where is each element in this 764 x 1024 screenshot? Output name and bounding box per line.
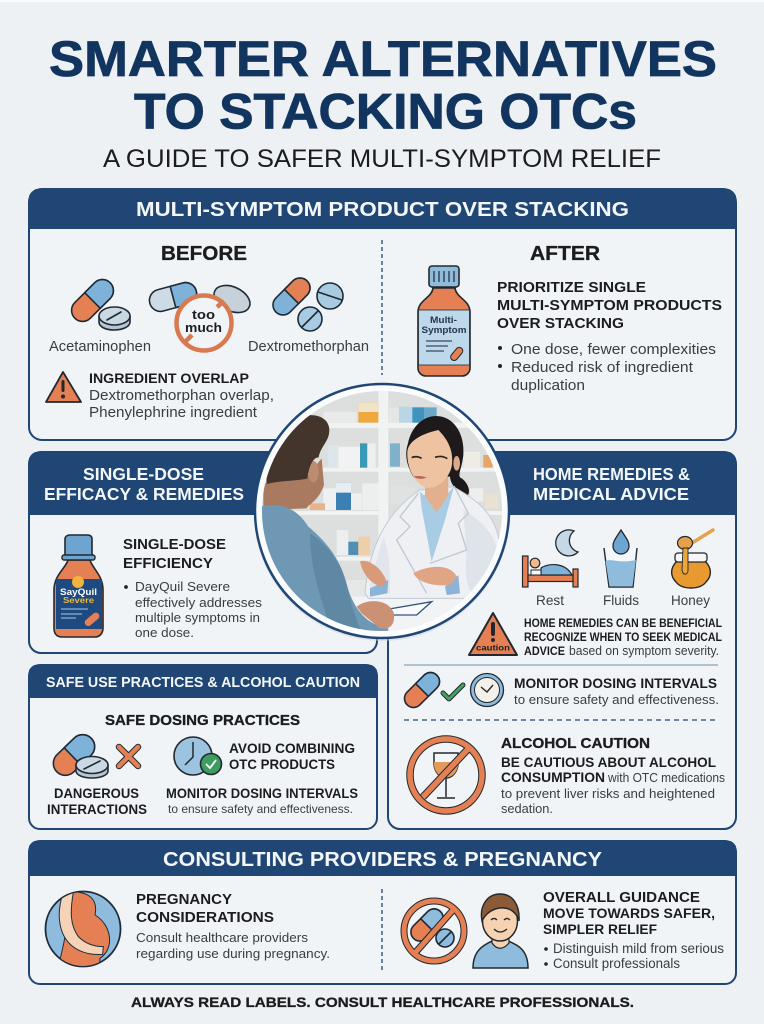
panel heading	[533, 464, 690, 504]
monitor dosing text: MONITOR DOSING INTERVALS	[166, 786, 358, 801]
icon: honey	[672, 530, 713, 588]
photo: pharmacist consulting a patient	[250, 380, 520, 650]
icon: warning triangle	[46, 372, 81, 402]
after text: PRIORITIZE SINGLE	[497, 280, 646, 296]
subtitle: A GUIDE TO SAFER MULTI-SYMPTOM RELIEF	[103, 145, 661, 173]
title	[49, 31, 717, 140]
alcohol caution text: ALCOHOL CAUTION	[501, 735, 650, 752]
single-dose efficiency text: one dose.	[135, 625, 194, 640]
icon: SayQuil bottle	[54, 535, 103, 637]
panel heading	[44, 464, 244, 504]
avoid combining text	[229, 740, 355, 772]
monitor dosing text: to ensure safety and effectiveness.	[514, 692, 719, 707]
icon: SayQuil bottle: SayQuil	[60, 587, 97, 598]
panel heading: SINGLE-DOSE	[83, 464, 204, 484]
panel heading: HOME REMEDIES &	[533, 464, 690, 484]
single-dose efficiency text: DayQuil Severe	[135, 579, 230, 594]
avoid combining text: OTC PRODUCTS	[229, 756, 335, 772]
man	[263, 458, 324, 510]
icon: multi-symptom bottle: Symptom	[422, 325, 466, 335]
after text: OVER STACKING	[497, 316, 624, 332]
pregnancy text: Consult healthcare providers	[136, 930, 309, 945]
after text: One dose, fewer complexities	[511, 341, 716, 358]
after text: MULTI-SYMPTOM PRODUCTS	[497, 298, 722, 314]
pregnancy text: regarding use during pregnancy.	[136, 946, 330, 961]
medical advice text: ADVICE	[524, 646, 565, 658]
avoid combining text: AVOID COMBINING	[229, 740, 355, 756]
panel heading: CONSULTING PROVIDERS & PREGNANCY	[163, 849, 603, 871]
remedy labels	[536, 592, 710, 608]
remedy labels: Rest	[536, 592, 564, 608]
footer note: ALWAYS READ LABELS. CONSULT HEALTHCARE PROFESSIONALS.	[131, 994, 634, 1010]
ingredient overlap text: INGREDIENT OVERLAP	[89, 371, 249, 386]
alcohol caution text: with OTC medications	[607, 770, 725, 785]
icon: dextromethorphan pills	[269, 274, 343, 331]
icon: dangerous interactions	[48, 730, 138, 780]
label: acetaminophen: Acetaminophen	[49, 339, 151, 355]
subheading: SAFE DOSING PRACTICES	[105, 713, 300, 729]
after text: duplication	[511, 377, 585, 394]
after text	[497, 280, 722, 394]
icon: rest	[522, 530, 578, 587]
ingredient overlap text: Phenylephrine ingredient	[89, 405, 257, 421]
overall guidance text: Consult professionals	[553, 956, 680, 971]
dangerous interactions label: INTERACTIONS	[47, 802, 147, 817]
dangerous interactions label: DANGEROUS	[54, 786, 139, 801]
icon: multi-symptom bottle	[418, 266, 470, 376]
icon: no alcohol	[410, 739, 482, 811]
dangerous interactions label	[47, 786, 147, 817]
panel heading: EFFICACY & REMEDIES	[44, 484, 244, 504]
medical advice text	[524, 618, 722, 658]
monitor dosing text: MONITOR DOSING INTERVALS	[514, 676, 717, 691]
title: TO STACKING OTCs	[134, 84, 637, 140]
alcohol caution text: to prevent liver risks and heightened	[501, 786, 715, 801]
alcohol caution text: sedation.	[501, 801, 553, 816]
before heading: BEFORE	[161, 243, 247, 265]
label: dextromethorphan: Dextromethorphan	[248, 339, 369, 355]
alcohol caution text: BE CAUTIOUS ABOUT ALCOHOL	[501, 754, 716, 770]
monitor dosing text	[166, 786, 358, 816]
icon: pregnancy	[46, 892, 120, 972]
panel: consulting providers and pregnancy	[28, 840, 737, 984]
alcohol caution text: CONSUMPTION	[501, 769, 605, 785]
remedy labels: Honey	[671, 592, 710, 608]
icon: SayQuil bottle: Severe	[63, 596, 95, 605]
pregnancy text	[136, 892, 330, 961]
medical advice text: HOME REMEDIES CAN BE BENEFICIAL	[524, 618, 722, 630]
icon: no stacked pills	[404, 901, 464, 961]
single-dose efficiency text: effectively addresses	[135, 595, 263, 610]
panel: safe use practices	[28, 664, 378, 829]
panel heading: MEDICAL ADVICE	[533, 484, 689, 504]
icon: too much warning	[147, 280, 254, 350]
icon: pill, check and clock	[401, 669, 504, 711]
overall guidance text: OVERALL GUIDANCE	[543, 890, 700, 906]
ingredient overlap text: Dextromethorphan overlap,	[89, 388, 274, 404]
icon: caution triangle: caution	[476, 642, 510, 652]
medical advice text: based on symptom severity.	[569, 644, 719, 658]
icon: clock with check	[174, 737, 222, 775]
single-dose efficiency text: multiple symptoms in	[135, 610, 260, 625]
icon: acetaminophen pills	[67, 275, 130, 330]
single-dose efficiency text: SINGLE-DOSE	[123, 537, 226, 553]
pregnancy text: CONSIDERATIONS	[136, 910, 274, 926]
single-dose efficiency text: EFFICIENCY	[123, 556, 213, 572]
icon: multi-symptom bottle: Multi-	[430, 315, 457, 325]
monitor dosing text	[514, 676, 719, 707]
icon: fluids	[604, 530, 637, 587]
pregnancy text: PREGNANCY	[136, 892, 232, 908]
after text: Reduced risk of ingredient	[511, 359, 694, 376]
overall guidance text: SIMPLER RELIEF	[543, 922, 657, 937]
panel: home remedies and medical advice	[387, 451, 737, 829]
panel: single-dose efficacy	[28, 451, 378, 653]
after heading: AFTER	[530, 243, 601, 265]
monitor dosing text: to ensure safety and effectiveness.	[168, 802, 353, 816]
panel heading: MULTI-SYMPTOM PRODUCT OVER STACKING	[136, 199, 629, 221]
icon: too much warning: much	[185, 321, 222, 335]
icon: smiling person	[473, 894, 528, 968]
overall guidance text: MOVE TOWARDS SAFER,	[543, 906, 715, 921]
ingredient overlap text	[89, 371, 274, 421]
overall guidance text: Distinguish mild from serious	[553, 941, 724, 956]
overall guidance text	[543, 890, 724, 971]
alcohol caution text	[501, 735, 725, 816]
icon: too much warning: too	[192, 308, 215, 322]
icon: caution triangle	[469, 613, 517, 655]
remedy labels: Fluids	[603, 592, 639, 608]
woman	[406, 416, 469, 496]
panel heading: SAFE USE PRACTICES & ALCOHOL CAUTION	[46, 674, 360, 691]
title: SMARTER ALTERNATIVES	[49, 31, 717, 87]
panel: multi-symptom product over stacking	[28, 188, 737, 440]
medical advice text: RECOGNIZE WHEN TO SEEK MEDICAL	[524, 632, 722, 644]
single-dose efficiency text	[123, 537, 263, 640]
